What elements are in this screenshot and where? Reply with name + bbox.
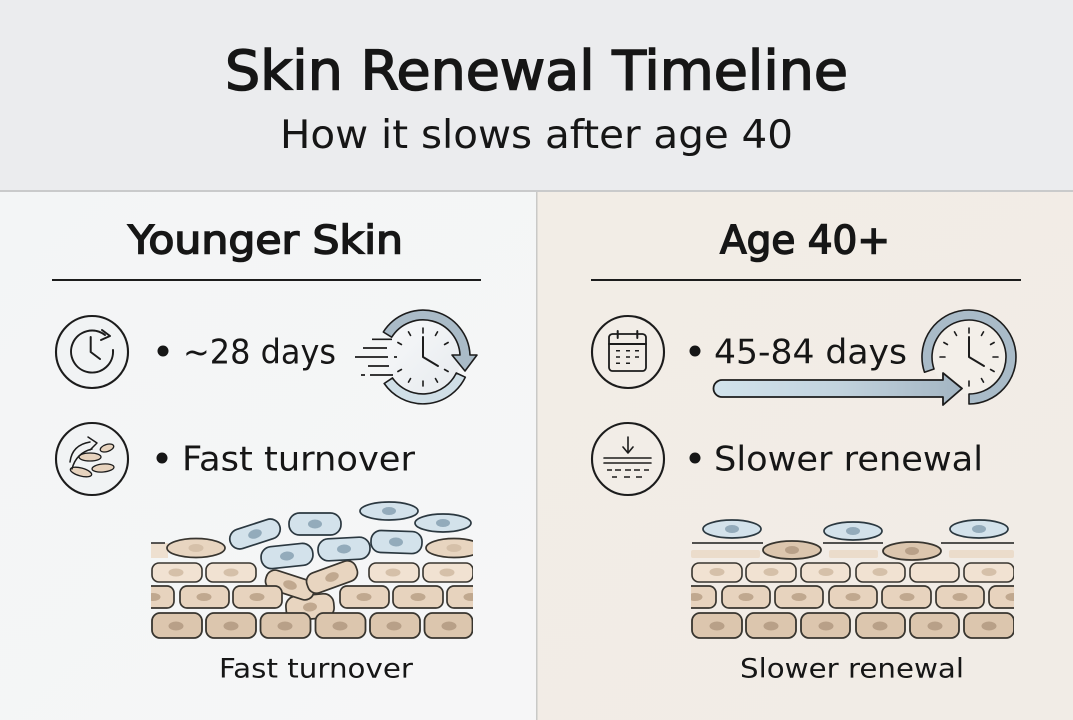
bullet: slower renewal: [690, 452, 700, 464]
upper cell row: [152, 563, 473, 582]
icon: clock cycle: [56, 316, 128, 388]
icon: slowed layers: [592, 423, 664, 495]
skin layers: age 40+: [691, 519, 1014, 639]
upper cell row: [692, 563, 1014, 582]
bottom cell row: [152, 613, 472, 638]
top tan layer: [151, 538, 482, 558]
subtitle: How it slows after age 40: [280, 113, 793, 158]
icon: calendar: [592, 316, 664, 388]
skin layers: younger: [151, 501, 473, 639]
middle cell row: [130, 586, 497, 608]
text: fast turnover: Fast turnover: [182, 440, 415, 480]
arrow: long timeline: [714, 373, 962, 405]
bullet: fast turnover: [156, 452, 168, 464]
heading rule right: [591, 279, 1021, 281]
middle cell row: [670, 586, 1039, 608]
bottom cell row: [692, 613, 1014, 638]
panel: age 40+: [536, 192, 1073, 720]
text: 45-84 days: 45-84 days: [714, 332, 907, 372]
title: Skin Renewal Timeline: [225, 40, 848, 102]
caption: fast turnover: Fast turnover: [219, 654, 414, 684]
icon: slow clock: [922, 310, 1016, 404]
caption: slower renewal: Slower renewal: [740, 654, 964, 684]
icon: fast clock with circular arrows: [355, 310, 477, 404]
icon: moving cells: [56, 423, 128, 495]
displaced tilted cell: [264, 569, 314, 601]
bullet: 28 days: [158, 346, 168, 356]
blue shedding cells: [227, 502, 471, 570]
panel: younger skin: [52, 222, 481, 678]
displaced rising cell: [306, 560, 358, 594]
header band: [0, 0, 1073, 192]
text: slower renewal: Slower renewal: [714, 440, 983, 480]
bullet: 45-84 days: [690, 346, 700, 356]
heading: younger skin: Younger Skin: [127, 218, 403, 264]
heading: age 40+: Age 40+: [720, 218, 890, 264]
displaced lower cell: [285, 593, 335, 621]
heading rule left: [52, 279, 481, 281]
text: 28 days: ~28 days: [183, 332, 336, 372]
surface layer: [691, 541, 1014, 560]
blue surface cells: [703, 520, 1008, 540]
